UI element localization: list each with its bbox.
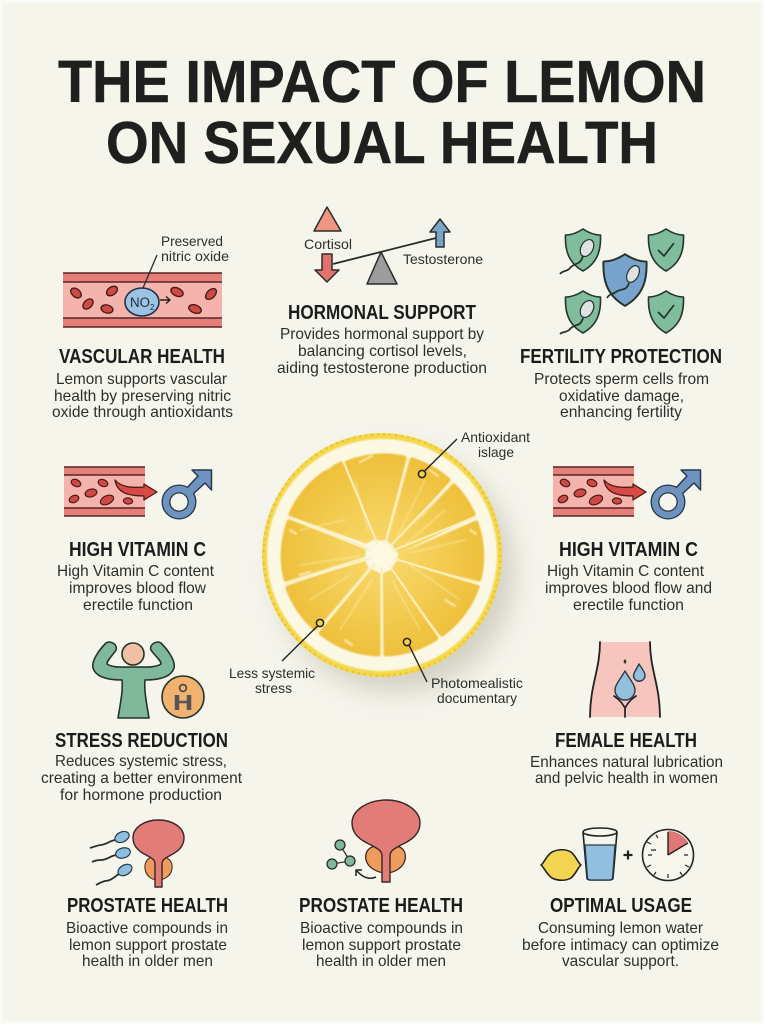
- panel: high vitamin C left: [57, 467, 215, 614]
- heading: HORMONAL SUPPORT: [288, 302, 476, 324]
- icon: hormone balance scale: [314, 207, 450, 284]
- callout: less systemic stress: stress: [255, 681, 292, 696]
- panel: hormonal support: [277, 207, 487, 377]
- body text: lemon support prostate: [69, 937, 227, 954]
- heading: FERTILITY PROTECTION: [520, 346, 722, 368]
- icon: blood vessel with nitric oxide: [63, 255, 222, 327]
- body text: balancing cortisol levels,: [298, 343, 467, 360]
- body text: lemon support prostate: [302, 937, 461, 954]
- body text: [277, 326, 487, 377]
- icon: blood vessel with nitric oxide: NO: [130, 295, 150, 310]
- panel: optimal usage: [522, 828, 719, 970]
- central lemon slice photo: [262, 433, 514, 692]
- callout: antioxidant islage: [418, 430, 530, 478]
- body text: oxide through antioxidants: [52, 404, 233, 421]
- body text: Lemon supports vascular: [56, 371, 227, 388]
- callout: antioxidant islage: Antioxidant: [461, 430, 530, 445]
- body text: Consuming lemon water: [538, 920, 703, 937]
- heading: HIGH VITAMIN C: [69, 539, 206, 561]
- body text: Enhances natural lubrication: [530, 754, 723, 771]
- heading: OPTIMAL USAGE: [550, 895, 692, 917]
- body text: [534, 371, 709, 421]
- panel: fertility protection: [520, 229, 722, 421]
- label: testosterone: Testosterone: [403, 252, 483, 267]
- panel: prostate health middle: [299, 800, 463, 970]
- body text: erectile function: [573, 597, 684, 614]
- title: [58, 49, 706, 176]
- icon: pelvis with droplets: [590, 642, 660, 717]
- title: ON SEXUAL HEALTH: [106, 110, 658, 176]
- body text: [41, 753, 243, 804]
- body text: [52, 371, 233, 421]
- body text: health by preserving nitric: [54, 388, 231, 405]
- label: cortisol: Cortisol: [304, 237, 352, 252]
- body text: oxidative damage,: [559, 388, 684, 405]
- body text: [300, 920, 463, 970]
- heading: PROSTATE HEALTH: [67, 895, 228, 917]
- icon: blood flow and male symbol: [553, 467, 700, 516]
- callout: preserved nitric oxide: [161, 234, 229, 264]
- body text: High Vitamin C content: [57, 563, 215, 580]
- icon: blood vessel with nitric oxide: 2: [150, 303, 155, 312]
- body text: [57, 563, 215, 614]
- body text: [522, 920, 719, 970]
- body text: High Vitamin C content: [547, 563, 705, 580]
- body text: aiding testosterone production: [277, 360, 487, 377]
- icon: lemon water and clock: [541, 828, 694, 880]
- body text: Reduces systemic stress,: [55, 753, 227, 770]
- body text: [66, 920, 228, 970]
- body text: health in older men: [316, 953, 446, 970]
- callout: photomealistic documentary: Photomealistic: [431, 676, 523, 691]
- callout: less systemic stress: Less systemic: [229, 666, 315, 681]
- body text: for hormone production: [60, 787, 222, 804]
- body text: creating a better environment: [41, 770, 243, 787]
- body text: [530, 754, 723, 787]
- body text: Protects sperm cells from: [534, 371, 709, 388]
- body text: before intimacy can optimize: [522, 937, 719, 954]
- body text: vascular support.: [562, 953, 679, 970]
- callout: antioxidant islage: islage: [478, 445, 514, 460]
- icon: flexing figure and hormone badge: [93, 642, 204, 718]
- callout: photomealistic documentary: documentary: [437, 691, 517, 706]
- panel: high vitamin C right: [545, 467, 712, 614]
- heading: HIGH VITAMIN C: [559, 539, 698, 561]
- body text: erectile function: [83, 597, 193, 614]
- body text: Bioactive compounds in: [300, 920, 463, 937]
- icon: sperm and shields: [560, 229, 684, 334]
- body text: Bioactive compounds in: [66, 920, 228, 937]
- heading: FEMALE HEALTH: [555, 730, 697, 752]
- body text: improves blood flow and: [545, 580, 712, 597]
- panel: stress reduction: [41, 642, 243, 804]
- body text: improves blood flow: [69, 580, 207, 597]
- heading: PROSTATE HEALTH: [299, 895, 463, 917]
- callout: preserved nitric oxide: Preserved: [161, 234, 223, 249]
- title: THE IMPACT OF LEMON: [58, 49, 706, 115]
- body text: [545, 563, 712, 614]
- icon: prostate with sperm: [90, 820, 184, 887]
- heading: VASCULAR HEALTH: [59, 346, 225, 368]
- callout: preserved nitric oxide: nitric oxide: [161, 249, 229, 264]
- icon: prostate with molecule: [327, 800, 420, 882]
- body text: Provides hormonal support by: [280, 326, 484, 343]
- body text: and pelvic health in women: [535, 770, 718, 787]
- panel: vascular health: [52, 234, 233, 421]
- body text: health in older men: [82, 953, 213, 970]
- callout: photomealistic documentary: [403, 638, 523, 706]
- heading: STRESS REDUCTION: [55, 730, 228, 752]
- panel: prostate health left: [66, 820, 228, 970]
- panel: female health: [530, 642, 723, 787]
- callout: less systemic stress: [229, 619, 324, 696]
- body text: enhancing fertility: [560, 404, 682, 421]
- icon: blood flow and male symbol: [64, 467, 212, 516]
